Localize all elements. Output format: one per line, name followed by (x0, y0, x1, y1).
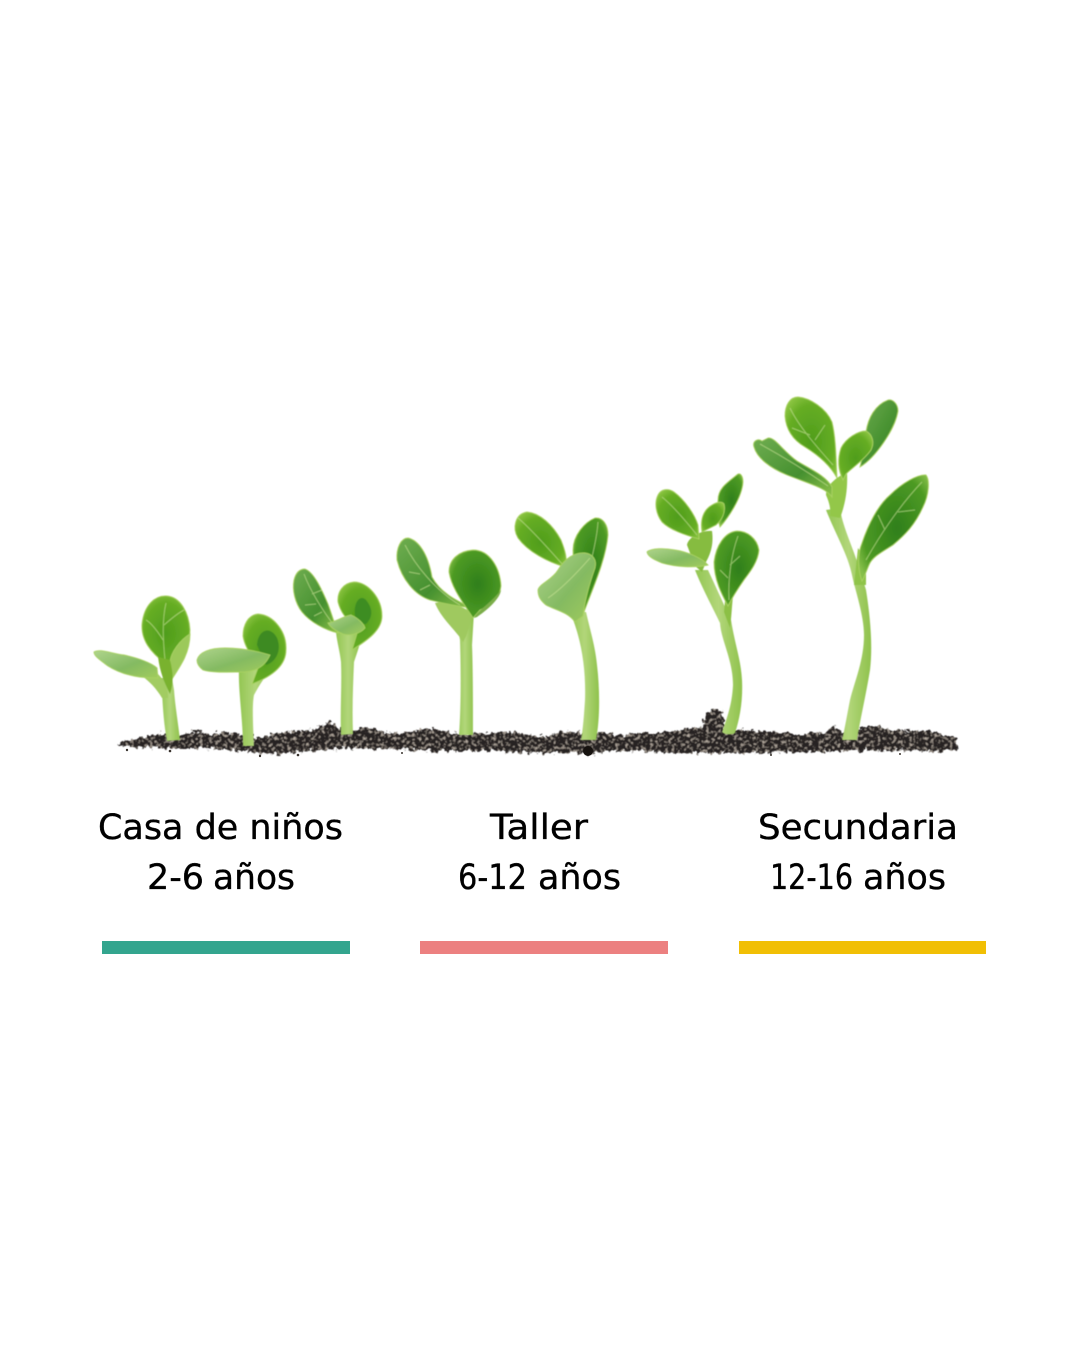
label: Taller: Taller (489, 808, 589, 848)
label: Secundaria: Secundaria (758, 808, 958, 848)
teal bar (102, 941, 350, 954)
seedling 3 (293, 569, 382, 735)
label: Taller: 6-12 (458, 858, 527, 898)
soil strip (117, 708, 957, 757)
label: Taller (458, 808, 621, 898)
label: Secundaria (758, 808, 958, 898)
pink bar (420, 941, 668, 954)
seedling 6 (647, 474, 759, 734)
label: Casa de niños (98, 808, 343, 898)
seedling 7 (754, 397, 928, 740)
label: Casa de niños: años (213, 858, 295, 898)
label: Casa de niños: 2-6 (147, 858, 204, 898)
label: Secundaria: 12-16 (770, 858, 853, 898)
seedling 1 (94, 596, 190, 741)
label: Taller: años (538, 858, 621, 898)
seedling 5 (515, 512, 608, 740)
yellow bar (739, 941, 986, 954)
label: Casa de niños: Casa de niños (98, 808, 343, 848)
seedling 4 (397, 538, 501, 735)
label: Secundaria: años (863, 858, 946, 898)
seedling 2 (197, 614, 286, 746)
